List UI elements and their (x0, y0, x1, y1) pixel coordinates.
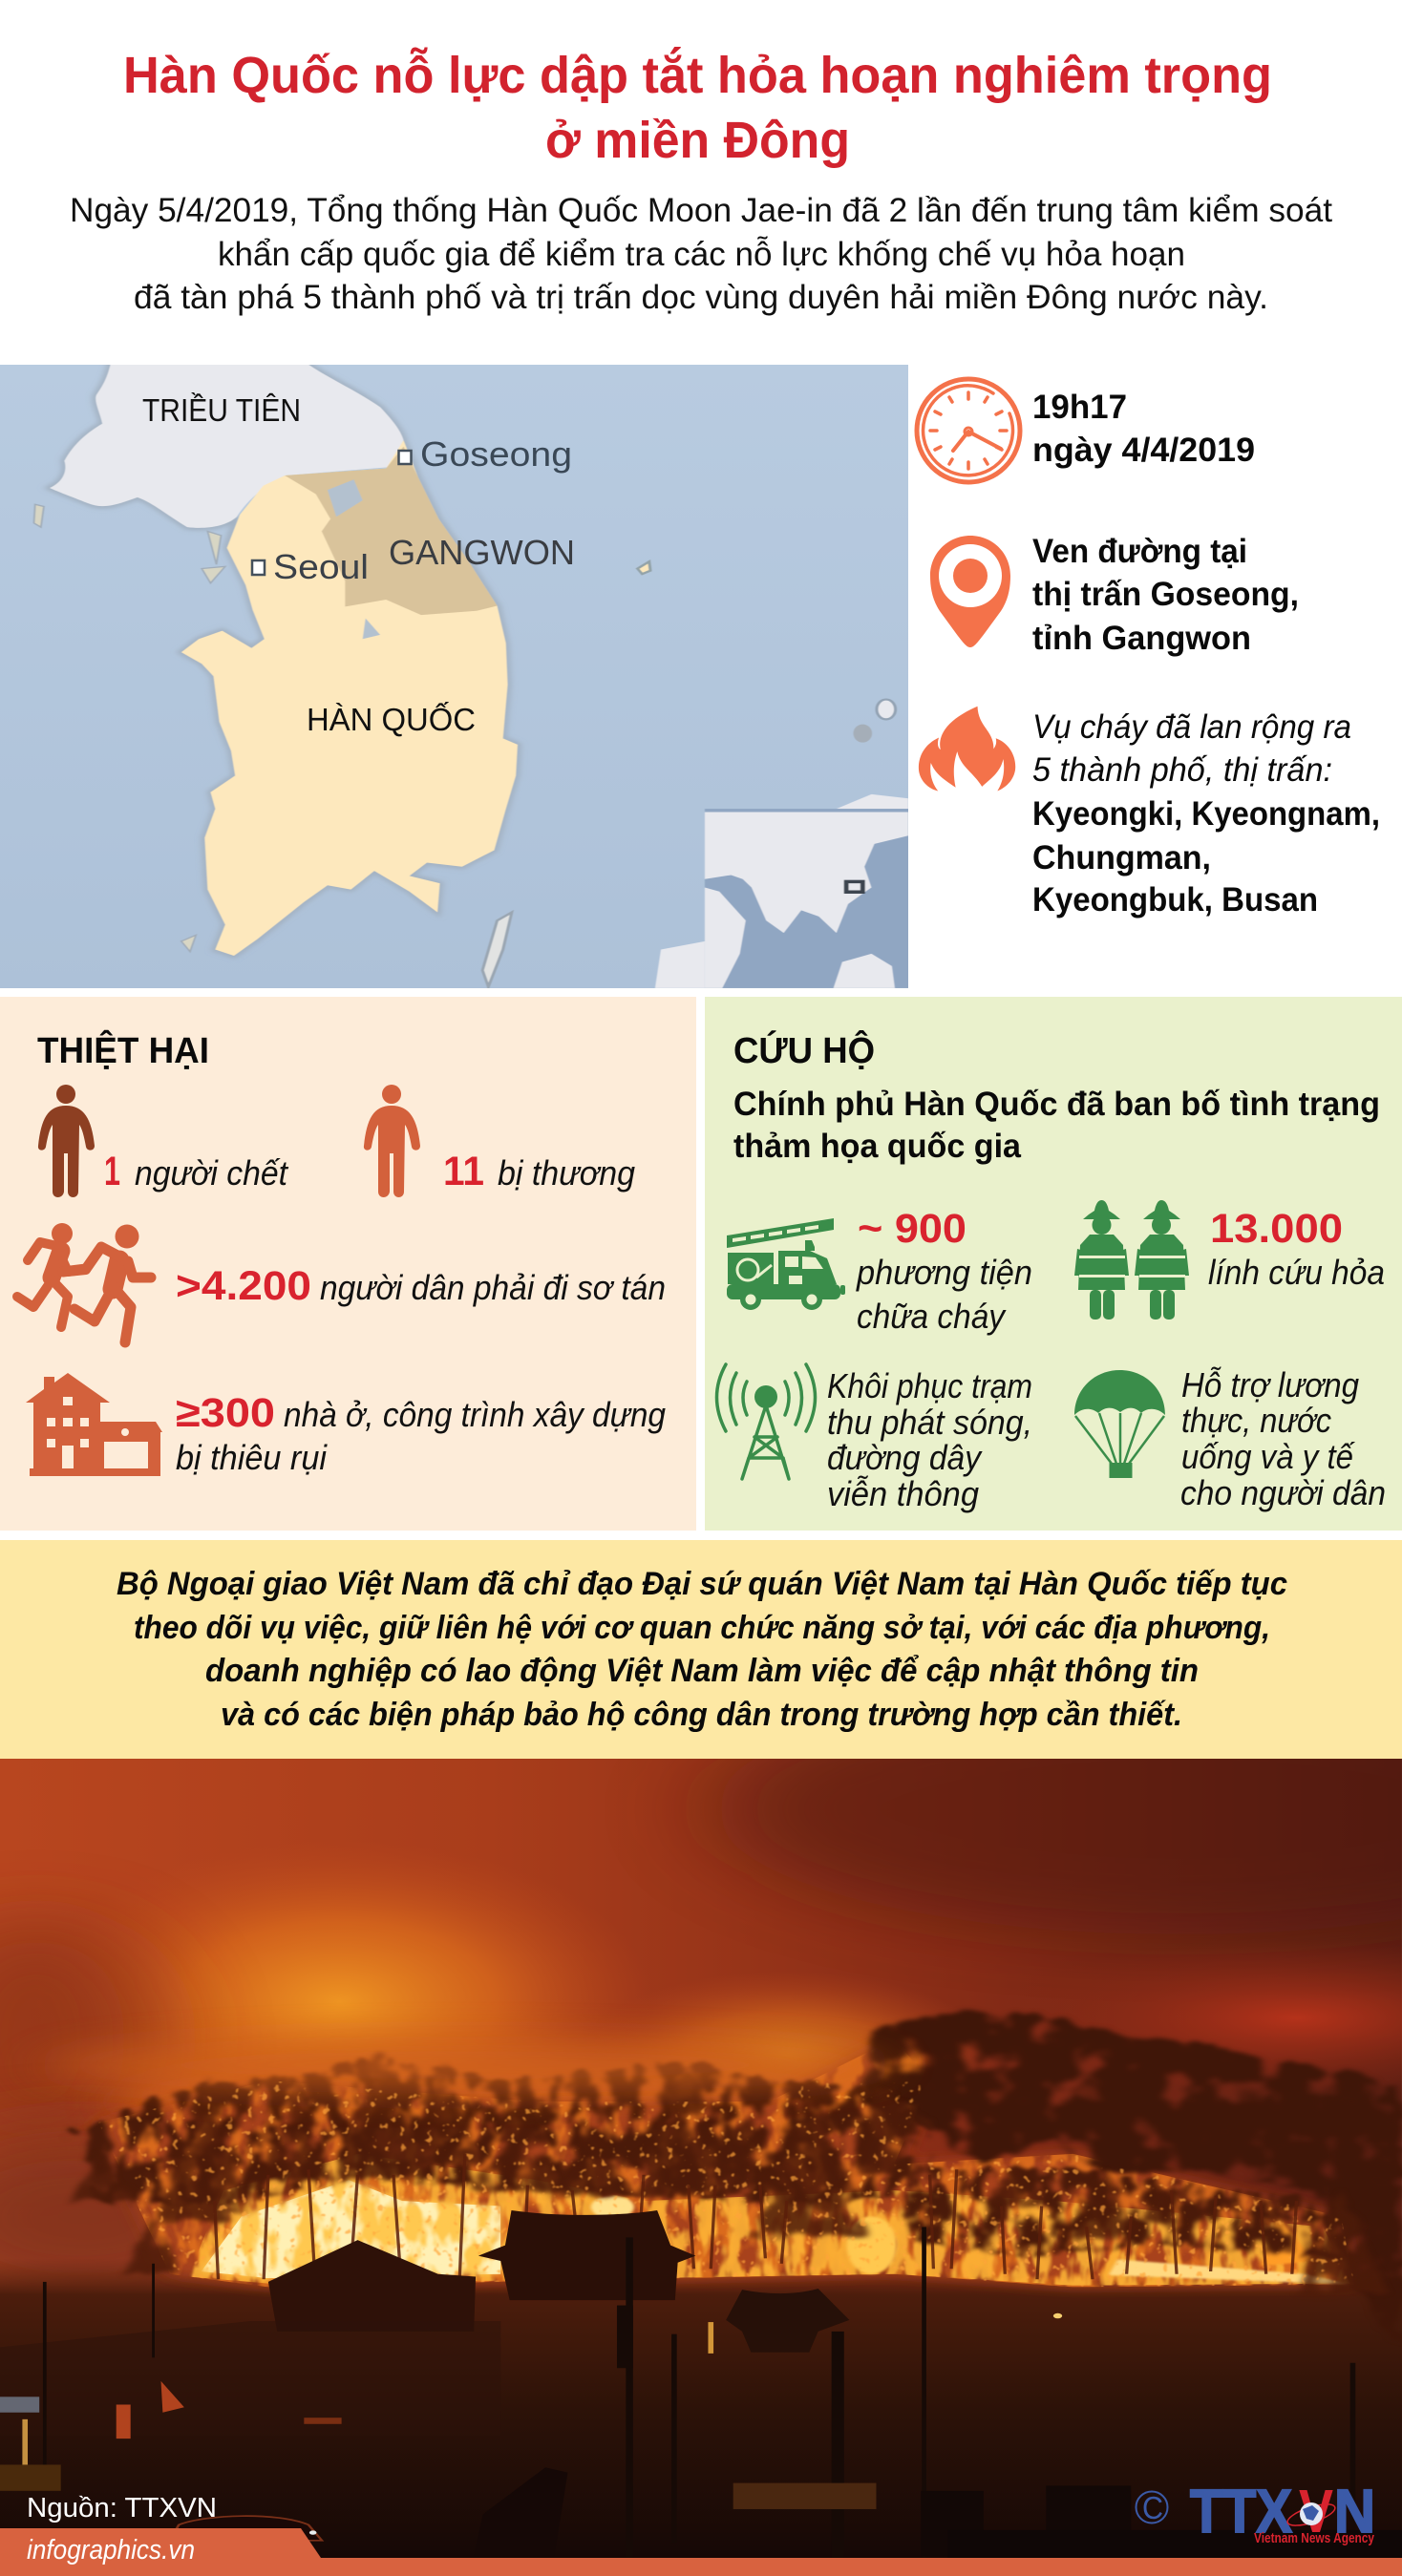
footer bar (0, 2528, 1402, 2576)
text: spread (1032, 708, 1380, 918)
tree trunks (215, 2154, 1296, 2279)
map labels: Goseong (420, 434, 572, 474)
logo: TTXVN: C (1142, 2490, 1163, 2525)
callout: Vietnam foreign ministry: theo dõi vụ việc, giữ liên hệ với cơ quan chức năng sở tại, với các địa phương, (134, 1610, 1270, 1646)
logo: TTXVN: TTX (1190, 2477, 1292, 2545)
logo: TTXVN: V (1299, 2477, 1333, 2545)
stat: vehicles: chữa cháy (857, 1297, 1007, 1336)
text: spread: Kyeongbuk, Busan (1032, 881, 1318, 918)
stat: injured: bị thương (498, 1153, 635, 1193)
poles and lights (42, 2227, 1356, 2502)
text: spread: Vụ cháy đã lan rộng ra (1032, 708, 1351, 746)
text: telecom: đường dây (827, 1438, 983, 1477)
map of Korea (0, 362, 909, 988)
stat: injured: 11 (443, 1149, 484, 1194)
callout: Vietnam foreign ministry: Bộ Ngoại giao Việt Nam đã chỉ đạo Đại sứ quán Việt Nam tại Hàn Quốc tiếp tục (117, 1566, 1287, 1602)
sparks (90, 2080, 1359, 2290)
text: location: tỉnh Gangwon (1032, 620, 1251, 657)
text: national disaster: thảm họa quốc gia (733, 1128, 1022, 1165)
text: spread: Kyeongki, Kyeongnam, (1032, 795, 1380, 833)
text: telecom: Khôi phục trạm (827, 1366, 1032, 1405)
North Korea landmass (50, 362, 404, 528)
icon: person injured (364, 1085, 420, 1197)
logo: TTXVN: N (1334, 2477, 1375, 2545)
panel: damage (0, 997, 696, 1531)
smoke haze over treetops (45, 2037, 885, 2094)
intro text: Ngày 5/4/2019, Tổng thống Hàn Quốc Moon Jae-in đã 2 lần đến trung tâm kiểm soát (70, 192, 1332, 229)
text: national disaster (733, 1086, 1380, 1165)
icon: person dead (38, 1085, 95, 1197)
text: spread: 5 thành phố, thị trấn: (1032, 751, 1332, 789)
stat: houses burned: ≥300 (176, 1390, 275, 1436)
text: telecom: viễn thông (827, 1474, 979, 1513)
city marker: Seoul (252, 560, 265, 575)
stat: firefighters: 13.000 (1210, 1206, 1343, 1252)
stat: vehicles (856, 1206, 1032, 1336)
map labels: Seoul (273, 547, 369, 586)
text: location (1032, 533, 1299, 657)
stat: vehicles: phương tiện (856, 1253, 1032, 1292)
intro text: khẩn cấp quốc gia để kiểm tra các nỗ lực khống chế vụ hỏa hoạn (218, 236, 1185, 273)
icon: house (26, 1373, 162, 1476)
panel: rescue (705, 997, 1402, 1531)
text: location: Ven đường tại (1032, 533, 1247, 570)
text: location: thị trấn Goseong, (1032, 576, 1299, 613)
text: supplies (1180, 1365, 1386, 1512)
upper forest mass (63, 2059, 1346, 2264)
stat: houses burned (176, 1390, 666, 1477)
title (123, 47, 1272, 169)
text: supplies: thực, nước (1181, 1401, 1331, 1440)
logo: TTXVN: Vietnam News Agency (1254, 2531, 1374, 2546)
map labels (142, 392, 575, 737)
fire glow layer (98, 2038, 1354, 2287)
source credit: Nguồn: TTXVN (27, 2493, 217, 2523)
stat: evacuated: >4.200 (176, 1263, 311, 1309)
icon: flame (919, 707, 1015, 792)
stat: vehicles: ~ 900 (858, 1206, 967, 1252)
stat: houses burned: nhà ở, công trình xây dựng (284, 1395, 666, 1434)
fire core (202, 2180, 500, 2278)
stat: deaths: 1 (104, 1149, 120, 1194)
stat: injured (443, 1149, 635, 1194)
islands (638, 561, 650, 574)
text: supplies: Hỗ trợ lương (1181, 1365, 1359, 1404)
text: telecom (827, 1366, 1032, 1513)
text: time (1032, 389, 1255, 469)
website: infographics.vn (27, 2535, 195, 2565)
callout: Vietnam foreign ministry: doanh nghiệp có lao động Việt Nam làm việc để cập nhật thông tin (205, 1653, 1199, 1689)
stat: firefighters (1208, 1206, 1385, 1292)
text: national disaster: Chính phủ Hàn Quốc đã ban bố tình trạng (733, 1086, 1380, 1123)
temple buildings (0, 2210, 850, 2353)
stat: evacuated (176, 1263, 666, 1309)
tree canopy (859, 2012, 1402, 2342)
stat: firefighters: lính cứu hỏa (1208, 1253, 1385, 1292)
icon: signal tower (716, 1364, 816, 1479)
inset locator map (705, 809, 909, 988)
logo: TTXVN (1136, 2477, 1375, 2546)
map labels: HÀN QUỐC (307, 701, 476, 737)
text: supplies: uống và y tế (1181, 1437, 1356, 1476)
heading: damage: THIỆT HẠI (37, 1029, 209, 1071)
South Korea landmass (181, 440, 518, 956)
map labels: GANGWON (389, 533, 575, 572)
intro text: đã tàn phá 5 thành phố và trị trấn dọc vùng duyên hải miền Đông nước này. (134, 279, 1268, 316)
icon: running people (17, 1223, 151, 1342)
stat: houses burned: bị thiêu rụi (176, 1438, 328, 1477)
icon: location pin (930, 536, 1010, 647)
icon: fire truck (727, 1218, 845, 1310)
stat: deaths: người chết (135, 1153, 289, 1193)
icon: parachute (1074, 1370, 1165, 1478)
callout: Vietnam foreign ministry: và có các biện pháp bảo hộ công dân trong trường hợp cần thiết. (221, 1697, 1182, 1733)
text: supplies: cho người dân (1180, 1473, 1386, 1512)
Gangwon province (285, 447, 498, 615)
stat: evacuated: người dân phải đi sơ tán (320, 1268, 666, 1307)
intro text (70, 192, 1332, 316)
heading: rescue: CỨU HỘ (733, 1028, 875, 1071)
callout: Vietnam foreign ministry (0, 1540, 1402, 1759)
text: time: 19h17 (1032, 389, 1127, 426)
map labels: TRIỀU TIÊN (142, 392, 301, 428)
text: telecom: thu phát sóng, (827, 1403, 1032, 1442)
title: ở miền Đông (545, 112, 850, 169)
text: spread: Chungman, (1032, 839, 1211, 876)
stat: deaths (104, 1149, 289, 1194)
title: Hàn Quốc nỗ lực dập tắt hỏa hoạn nghiêm trọng (123, 47, 1272, 104)
photo: forest fire at night (0, 1683, 1402, 2562)
city marker: Goseong (399, 451, 411, 464)
icon: clock (917, 379, 1020, 482)
icon: firefighters (1074, 1200, 1189, 1320)
text: time: ngày 4/4/2019 (1032, 432, 1255, 469)
